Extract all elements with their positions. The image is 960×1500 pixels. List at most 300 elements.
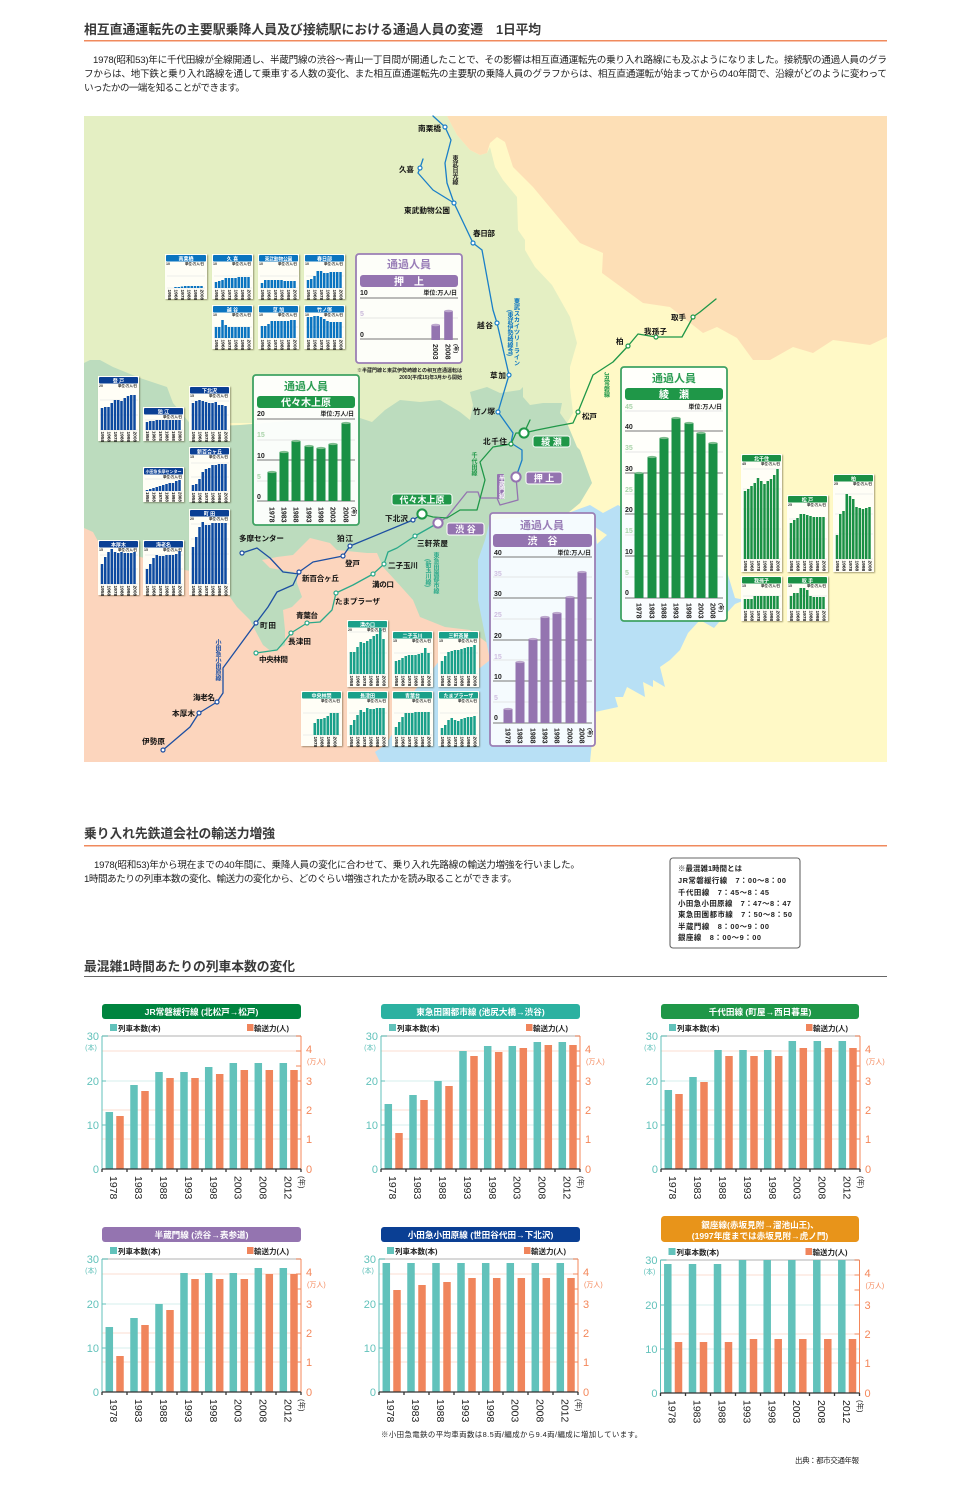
- card: 久喜: 久 喜: [227, 255, 238, 262]
- line names: 半蔵門線: [498, 474, 504, 500]
- card: 我孫子: 我孫子: [754, 577, 769, 584]
- panel: 綾瀬 through passengers: [621, 367, 727, 621]
- card: 二子玉川: 2008: [426, 676, 432, 687]
- panel: 代々木上原 through passengers: 20: [257, 411, 265, 418]
- card: 海老名: 1968: [150, 586, 156, 597]
- card: 竹ノ塚: 10: [305, 313, 309, 317]
- card: 町田: 2008: [222, 586, 228, 597]
- card: 柏: 1968: [840, 560, 846, 572]
- card: 東武動物公園: 2008: [292, 290, 298, 301]
- chart: 半蔵門線: (本): [85, 1266, 97, 1275]
- title: main heading: 相互直通運転先の主要駅乗降人員及び接続駅における通過人員の変遷: [84, 22, 483, 37]
- panel: 綾瀬 through passengers: 35: [625, 445, 633, 452]
- panel: 代々木上原 through passengers: 代々木上原: [281, 396, 331, 409]
- card: 取手: 1978: [801, 610, 807, 622]
- chart: 半蔵門線: 0: [306, 1387, 312, 1399]
- card: 久喜: 1968: [220, 290, 226, 301]
- card: 海老名: [143, 540, 184, 597]
- panel: 押上 through passengers: 10: [360, 290, 368, 297]
- panel: 代々木上原 through passengers: 15: [257, 432, 265, 439]
- card: 東武動物公園: 単位:万人/日: [278, 261, 297, 266]
- card: 越谷: 1978: [226, 340, 232, 351]
- card: 町田: 1968: [196, 586, 202, 597]
- panel: 綾瀬 through passengers: 30: [625, 466, 633, 473]
- railway lines: [163, 116, 716, 750]
- chart: 半蔵門線: 1988: [157, 1399, 169, 1423]
- station labels: 海老名: [193, 692, 215, 702]
- station labels: 伊勢原: [142, 736, 165, 746]
- card: 取手: 1958: [788, 610, 793, 621]
- chart: 千代田線: 3: [865, 1076, 871, 1088]
- panel: 渋谷 through passengers: 40: [494, 550, 502, 557]
- callout: peak hour definitions: 銀座線 8：00〜9：00: [678, 933, 761, 942]
- card: 柏: 1958: [834, 560, 839, 571]
- chart: 半蔵門線: 1983: [132, 1399, 144, 1423]
- card: 下北沢: 下北沢: [202, 387, 217, 394]
- chart: 千代田線: (本): [644, 1043, 656, 1052]
- chart: 小田急小田原線: 1: [583, 1357, 589, 1369]
- chart: 半蔵門線: 1: [306, 1357, 312, 1369]
- chart: 銀座線: 1993: [740, 1400, 752, 1424]
- station badges: 押 上: [534, 472, 554, 484]
- line names: (新玉川線): [424, 559, 431, 587]
- card: たまプラーザ: 1968: [446, 736, 452, 748]
- panel: 代々木上原 through passengers: [253, 375, 359, 525]
- card: 東武動物公園: 10: [259, 262, 263, 266]
- card: 竹ノ塚: 1998: [331, 340, 337, 351]
- chart: 小田急小田原線: 小田急小田原線 (世田谷代田→下北沢): [408, 1229, 553, 1240]
- card: 取手: 1988: [808, 610, 814, 622]
- panel: 代々木上原 through passengers: 1998: [316, 507, 324, 523]
- callout: peak hour definitions: 小田急小田原線 7：47〜8：47: [678, 899, 791, 908]
- card: たまプラーザ: 単位:万人/日: [458, 698, 477, 703]
- card: 我孫子: 15: [742, 584, 746, 588]
- station labels: 狛江: [337, 533, 353, 543]
- chart: 銀座線: 20: [645, 1300, 658, 1312]
- station badges: 代々木上原: [399, 494, 445, 505]
- chart: 東急田園都市線: 列車本数(本): [397, 1023, 440, 1033]
- chart: 東急田園都市線: 1993: [461, 1176, 473, 1200]
- heading: transport capacity section: 乗り入れ先鉄道会社の輸送力増強: [84, 826, 275, 841]
- chart: JR常磐緩行線: 2008: [256, 1176, 268, 1200]
- panel: 渋谷 through passengers: 通過人員: [520, 518, 564, 532]
- card: たまプラーザ: 1958: [439, 736, 444, 747]
- chart: 小田急小田原線: 3: [583, 1299, 589, 1311]
- card: 久喜: 1978: [226, 290, 232, 301]
- station labels: たまプラーザ: [335, 596, 380, 606]
- card: 溝の口: 溝の口: [360, 621, 375, 628]
- chart: JR常磐緩行線: 4: [306, 1044, 312, 1056]
- card: 松戸: [787, 495, 828, 572]
- card: 草加: 1978: [272, 340, 278, 351]
- chart: 小田急小田原線: 2: [583, 1328, 589, 1340]
- chart: 東急田園都市線: (本): [364, 1043, 376, 1052]
- panel: 代々木上原 through passengers: 2008: [342, 507, 348, 523]
- line names: 千代田線: [470, 451, 477, 477]
- panel: 渋谷 through passengers: 2008: [578, 728, 584, 744]
- chart: 銀座線: 2008: [815, 1400, 827, 1424]
- chart: JR常磐緩行線: 2012: [282, 1176, 294, 1200]
- card: 新百合ヶ丘: 1968: [196, 492, 202, 504]
- card: 登戸: 1988: [118, 432, 124, 443]
- card: 新百合ヶ丘: 1958: [190, 492, 195, 503]
- chart: 銀座線: 列車本数(本): [676, 1247, 719, 1257]
- chart: 小田急小田原線: 1988: [434, 1399, 446, 1423]
- card: 登戸: 登 戸: [113, 377, 124, 384]
- chart: JR常磐緩行線: 0: [306, 1164, 312, 1176]
- chart: 東急田園都市線: 1978: [386, 1176, 398, 1200]
- card: 下北沢: 2008: [222, 432, 228, 443]
- card: 北千住: 1988: [762, 560, 768, 572]
- card: 越谷: 越 谷: [227, 306, 238, 313]
- station labels: 竹ノ塚: [473, 406, 495, 416]
- text block: intro paragraph: フからは、地下鉄と乗り入れ路線を通して乗車する人数の変化、また相互直通運転先の主要駅の乗降人員のグラフからは、相互直通運転が始まってからの40年間で、沿線がどのように変わって: [84, 68, 887, 80]
- card: 狛江: 1958: [145, 431, 150, 441]
- card: 新百合ヶ丘: 新百合ヶ丘: [197, 448, 222, 455]
- chart: 半蔵門線: (年): [297, 1399, 307, 1412]
- panel: 渋谷 through passengers: 1993: [540, 728, 548, 744]
- card: 二子玉川: 二子玉川: [402, 632, 423, 639]
- chart: 千代田線: 2008: [816, 1176, 828, 1200]
- card: 海老名: 単位:万人/日: [163, 547, 182, 552]
- card: 新百合ヶ丘: 15: [190, 455, 194, 459]
- card: 北千住: 1968: [748, 560, 754, 572]
- card: 新百合ヶ丘: 単位:万人/日: [209, 454, 228, 459]
- card: 南栗橋: 1968: [172, 290, 178, 301]
- station labels: 松戸: [582, 411, 597, 421]
- panel: 代々木上原 through passengers: 1993: [304, 507, 312, 523]
- card: 登戸: 20: [99, 384, 103, 388]
- card: 久喜: [212, 254, 253, 301]
- chart: 東急田園都市線: [364, 1004, 605, 1200]
- station labels: 久喜: [399, 164, 414, 174]
- chart: 銀座線: 1: [864, 1358, 871, 1370]
- station badges: 渋 谷: [455, 524, 476, 534]
- chart: 千代田線: 2: [865, 1105, 871, 1117]
- panel: 綾瀬 through passengers: 15: [625, 528, 633, 535]
- card: 柏: 1998: [860, 560, 866, 572]
- card: 長津田: 2008: [380, 736, 386, 748]
- chart: 小田急小田原線: 1998: [484, 1399, 496, 1423]
- card: 取手: 15: [788, 584, 792, 588]
- card: 小田急多摩センター: 2008: [178, 492, 182, 502]
- card: 南栗橋: 1978: [179, 290, 185, 301]
- chart: 千代田線: 2003: [790, 1176, 802, 1200]
- card: 海老名: 1978: [157, 586, 163, 597]
- card: 竹ノ塚: 2008: [338, 340, 344, 351]
- card: 青葉台: [392, 691, 433, 748]
- chart: 東急田園都市線: 2: [585, 1105, 591, 1117]
- chart: 東急田園都市線: 0: [372, 1164, 378, 1176]
- chart: JR常磐緩行線: 1: [306, 1134, 312, 1146]
- chart: 半蔵門線: [85, 1227, 326, 1423]
- chart: 千代田線: 1983: [691, 1176, 703, 1200]
- card: 春日部: 10: [305, 262, 309, 266]
- small charts: Odakyu stations: [98, 376, 230, 597]
- chart: 銀座線: 10: [645, 1344, 658, 1356]
- card: 下北沢: 1998: [216, 432, 222, 443]
- panel: 押上 through passengers: [356, 254, 462, 363]
- card: 東武動物公園: 1988: [278, 290, 284, 301]
- card: 海老名: 2008: [176, 586, 182, 597]
- card: 青葉台: 1988: [412, 736, 418, 748]
- card: 草加: 1968: [266, 340, 272, 351]
- card: 長津田: 1978: [361, 736, 367, 748]
- card: 竹ノ塚: 1958: [305, 340, 310, 350]
- card: 柏: 柏: [851, 475, 856, 482]
- chart: 東急田園都市線: 1998: [486, 1176, 498, 1200]
- card: 青葉台: 1998: [419, 736, 425, 748]
- card: 春日部: 1958: [305, 290, 310, 300]
- card: 久喜: 1988: [232, 290, 238, 301]
- chart: 小田急小田原線: 0: [370, 1387, 376, 1399]
- chart: 小田急小田原線: 1993: [459, 1399, 471, 1423]
- card: 海老名: 15: [144, 548, 148, 552]
- title: main heading: 1日平均: [496, 22, 541, 37]
- card: 南栗橋: 10: [166, 262, 170, 266]
- chart: 千代田線: 4: [865, 1044, 871, 1056]
- panel: 綾瀬 through passengers: 20: [625, 507, 633, 514]
- chart: 半蔵門線: 2003: [232, 1399, 244, 1423]
- card: 小田急多摩センター: 1988: [164, 492, 170, 502]
- chart: 半蔵門線: 1978: [107, 1399, 119, 1423]
- card: 二子玉川: 単位:万人/日: [412, 638, 431, 643]
- chart: 銀座線: 1978: [666, 1400, 678, 1424]
- panel: 代々木上原 through passengers: 5: [257, 474, 261, 481]
- card: たまプラーザ: 2008: [472, 736, 478, 748]
- station labels: 草加: [490, 370, 506, 380]
- title: main heading: [84, 22, 887, 42]
- panel: 代々木上原 through passengers: 0: [257, 494, 261, 501]
- card: 東武動物公園: 東武動物公園: [265, 255, 293, 262]
- text block: intro paragraph: 1978(昭和53)年に千代田線が全線開通し、半蔵門線の渋谷〜青山一丁目間が開通したことで、その影響は相互直通運転先の乗り入れ路線にも及ぶようになりました。接続駅の通過人員のグラ: [93, 54, 887, 66]
- card: 登戸: 1968: [106, 432, 112, 443]
- card: 春日部: 2008: [338, 290, 344, 301]
- card: 柏: 2008: [866, 560, 872, 572]
- card: 青葉台: 青葉台: [405, 692, 420, 699]
- chart: 東急田園都市線: 1983: [411, 1176, 423, 1200]
- card: 新百合ヶ丘: 1988: [210, 492, 216, 504]
- card: 北千住: 45: [742, 462, 746, 466]
- card: 我孫子: [741, 576, 782, 622]
- panel: 綾瀬 through passengers: 5: [625, 570, 629, 577]
- card: 狛江: 狛 江: [158, 408, 169, 415]
- station labels: 越谷: [477, 320, 493, 330]
- text block: intro paragraph: [84, 54, 887, 94]
- callout: peak hour definitions: ※最混雑1時間とは: [678, 864, 743, 873]
- card: 海老名: 1988: [164, 586, 170, 597]
- card: 下北沢: [189, 386, 230, 443]
- card: 下北沢: 15: [190, 394, 194, 398]
- panel: 綾瀬 through passengers: 25: [625, 487, 633, 494]
- chart: 小田急小田原線: 4: [583, 1267, 589, 1279]
- panel: 綾瀬 through passengers: 10: [625, 549, 633, 556]
- card: 長津田: 1988: [368, 736, 374, 748]
- note under 押上 panel: ※半蔵門線と東武伊勢崎線との相互直通運転は: [357, 367, 462, 374]
- panel: 代々木上原 through passengers: 1978: [268, 507, 274, 523]
- card: たまプラーザ: 1978: [452, 736, 458, 748]
- card: 本厚木: 1968: [106, 586, 112, 597]
- panel: 押上 through passengers: 通過人員: [387, 257, 431, 271]
- chart: 千代田線: 30: [646, 1031, 658, 1043]
- chart: 銀座線: 0: [651, 1388, 658, 1400]
- panel: 綾瀬 through passengers: 2008: [708, 603, 716, 619]
- card: 越谷: 10: [213, 313, 217, 317]
- panel: 渋谷 through passengers: 1978: [504, 728, 510, 744]
- chart: 東急田園都市線: 2003: [510, 1176, 522, 1200]
- card: 下北沢: 1968: [196, 432, 202, 443]
- chart: 銀座線: 2: [864, 1329, 871, 1341]
- chart: 千代田線: 1998: [766, 1176, 778, 1200]
- card: 春日部: [304, 254, 345, 301]
- card: 北千住: 2008: [774, 560, 780, 572]
- panel: 代々木上原 through passengers: 10: [257, 453, 265, 460]
- card: 我孫子: 1978: [755, 610, 761, 622]
- card: 久喜: 単位:万人/日: [232, 261, 251, 266]
- card: 我孫子: 1968: [748, 610, 754, 622]
- station labels: 三軒茶屋: [417, 538, 448, 548]
- chart: 半蔵門線: 1998: [207, 1399, 219, 1423]
- panel: 渋谷 through passengers: 1988: [528, 728, 536, 744]
- text block: intro paragraph: いったかの一端を知ることができます。: [84, 82, 245, 94]
- panel: 綾瀬 through passengers: 通過人員: [652, 371, 696, 385]
- panel: 渋谷 through passengers: 0: [494, 715, 498, 722]
- chart: 東急田園都市線: 1: [585, 1134, 591, 1146]
- chart: 半蔵門線: 10: [87, 1343, 99, 1355]
- card: 我孫子: 1988: [762, 610, 768, 622]
- card: 東武動物公園: 1998: [285, 290, 291, 301]
- card: 町田: 1998: [216, 586, 222, 597]
- source: 出典：都市交通年報: [795, 1456, 860, 1465]
- card: 本厚木: 1958: [99, 586, 104, 596]
- card: 我孫子: 1998: [768, 610, 774, 622]
- card: 小田急多摩センター: 単位:万人/日: [163, 474, 182, 479]
- card: 東武動物公園: 1968: [266, 290, 272, 301]
- card: 越谷: 単位:万人/日: [232, 312, 251, 317]
- panel: 渋谷 through passengers: 単位:万人/日: [557, 549, 591, 557]
- text block: capacity paragraph: 1時間あたりの列車本数の変化、輸送力の変化から、どのぐらい増強されたかを読み取ることができます。: [84, 873, 517, 885]
- chart: JR常磐緩行線: 1978: [107, 1176, 119, 1200]
- card: 三軒茶屋: 1958: [439, 676, 444, 686]
- small charts: Joban line stations: [741, 454, 874, 622]
- card: 北千住: 1978: [755, 560, 761, 572]
- card: 久喜: 10: [213, 262, 217, 266]
- card: 町田: 20: [190, 517, 194, 521]
- line names: 東急田園都市線: [432, 551, 439, 595]
- card: 二子玉川: 1968: [400, 676, 406, 687]
- card: 中央林間: 1978: [312, 736, 317, 747]
- chart: 半蔵門線: 2012: [282, 1399, 294, 1423]
- card: 二子玉川: 1958: [393, 676, 398, 686]
- card: 取手: 1968: [794, 610, 800, 622]
- panel: 渋谷 through passengers: 15: [494, 654, 502, 661]
- card: 狛江: [143, 407, 184, 441]
- chart: 小田急小田原線: 20: [364, 1299, 376, 1311]
- line names: JR常磐線: [602, 372, 610, 399]
- chart: 半蔵門線: 2008: [256, 1399, 268, 1423]
- chart: 千代田線: 10: [646, 1120, 658, 1132]
- chart: 小田急小田原線: 輸送力(人): [531, 1246, 566, 1256]
- card: 本厚木: 単位:万人/日: [118, 547, 137, 552]
- chart: 千代田線: 1978: [666, 1176, 678, 1200]
- panel: 渋谷 through passengers: 35: [494, 571, 502, 578]
- callout: peak hour definitions: [670, 858, 800, 948]
- panel: 綾瀬 through passengers: 1998: [684, 603, 692, 619]
- card: 三軒茶屋: 1978: [452, 676, 458, 687]
- card: 青葉台: 1978: [406, 736, 412, 748]
- chart: 銀座線: 1983: [690, 1400, 702, 1424]
- callout: peak hour definitions: 東急田園都市線 7：50〜8：50: [678, 910, 792, 919]
- chart: JR常磐緩行線: 1988: [157, 1176, 169, 1200]
- chart: JR常磐緩行線: 1998: [207, 1176, 219, 1200]
- panel: 渋谷 through passengers: 20: [494, 633, 502, 640]
- card: 南栗橋: 1958: [166, 290, 171, 300]
- card: 登戸: 1978: [112, 432, 118, 443]
- chart: 銀座線: 3: [864, 1300, 871, 1312]
- chart: 小田急小田原線: (年): [574, 1399, 584, 1412]
- card: 町田: [189, 509, 230, 597]
- station labels: 長津田: [288, 636, 311, 646]
- card: たまプラーザ: 1988: [458, 736, 464, 748]
- chart: 東急田園都市線: 0: [585, 1164, 591, 1176]
- station badges: [392, 436, 570, 535]
- card: 我孫子: 1958: [742, 610, 747, 621]
- card: 狛江: 単位:万人/日: [163, 414, 182, 419]
- card: 小田急多摩センター: 小田急多摩センター: [146, 468, 182, 474]
- chart: 千代田線: 千代田線 (町屋→西日暮里): [709, 1006, 811, 1017]
- panel: 綾瀬 through passengers: 2003: [696, 603, 704, 619]
- chart: JR常磐緩行線: 3: [306, 1076, 312, 1088]
- card: 三軒茶屋: 2008: [472, 676, 478, 687]
- station labels: 南栗橋: [418, 123, 441, 133]
- panel: 代々木上原 through passengers: 1988: [292, 507, 298, 523]
- card: 三軒茶屋: [438, 631, 479, 687]
- station labels: 我孫子: [644, 326, 667, 336]
- card: 中央林間: 単位:万人/日: [321, 698, 340, 703]
- card: 下北沢: 1978: [203, 432, 209, 443]
- card: 草加: 1998: [285, 340, 291, 351]
- card: 青葉台: 1958: [393, 736, 398, 747]
- panel: 押上 through passengers: 押 上: [394, 275, 424, 288]
- station labels: 東武動物公園: [404, 205, 450, 215]
- card: 小田急多摩センター: [143, 467, 184, 502]
- card: 越谷: 1958: [213, 340, 218, 350]
- line names: 東武スカイツリーライン: [512, 297, 520, 366]
- card: 溝の口: 20: [348, 628, 352, 632]
- chart: 小田急小田原線: 2003: [508, 1399, 520, 1423]
- card: 溝の口: 2008: [380, 676, 386, 687]
- chart: 東急田園都市線: 3: [585, 1076, 591, 1088]
- card: 松戸: 松 戸: [802, 496, 813, 503]
- card: 二子玉川: 1998: [419, 676, 425, 687]
- card: 小田急多摩センター: 1978: [158, 492, 163, 502]
- chart: 東急田園都市線: 2008: [536, 1176, 548, 1200]
- card: 下北沢: 単位:万人/日: [209, 393, 228, 398]
- chart: 銀座線: 1988: [716, 1400, 728, 1424]
- chart: 千代田線: 列車本数(本): [677, 1023, 720, 1033]
- card: 青葉台: 2008: [426, 736, 432, 748]
- chart: 半蔵門線: 半蔵門線 (渋谷→表参道): [154, 1229, 249, 1240]
- card: 東武動物公園: 1958: [259, 290, 264, 300]
- chart: 銀座線: [644, 1216, 884, 1424]
- card: 町田: 1958: [190, 586, 195, 596]
- panel: 押上 through passengers: 0: [360, 332, 364, 339]
- card: 新百合ヶ丘: 1998: [216, 492, 222, 504]
- card: 春日部: 1968: [312, 290, 318, 301]
- card: 北千住: 単位:万人/日: [761, 461, 780, 466]
- card: 溝の口: [347, 620, 388, 687]
- card: 町田: 町 田: [204, 511, 215, 517]
